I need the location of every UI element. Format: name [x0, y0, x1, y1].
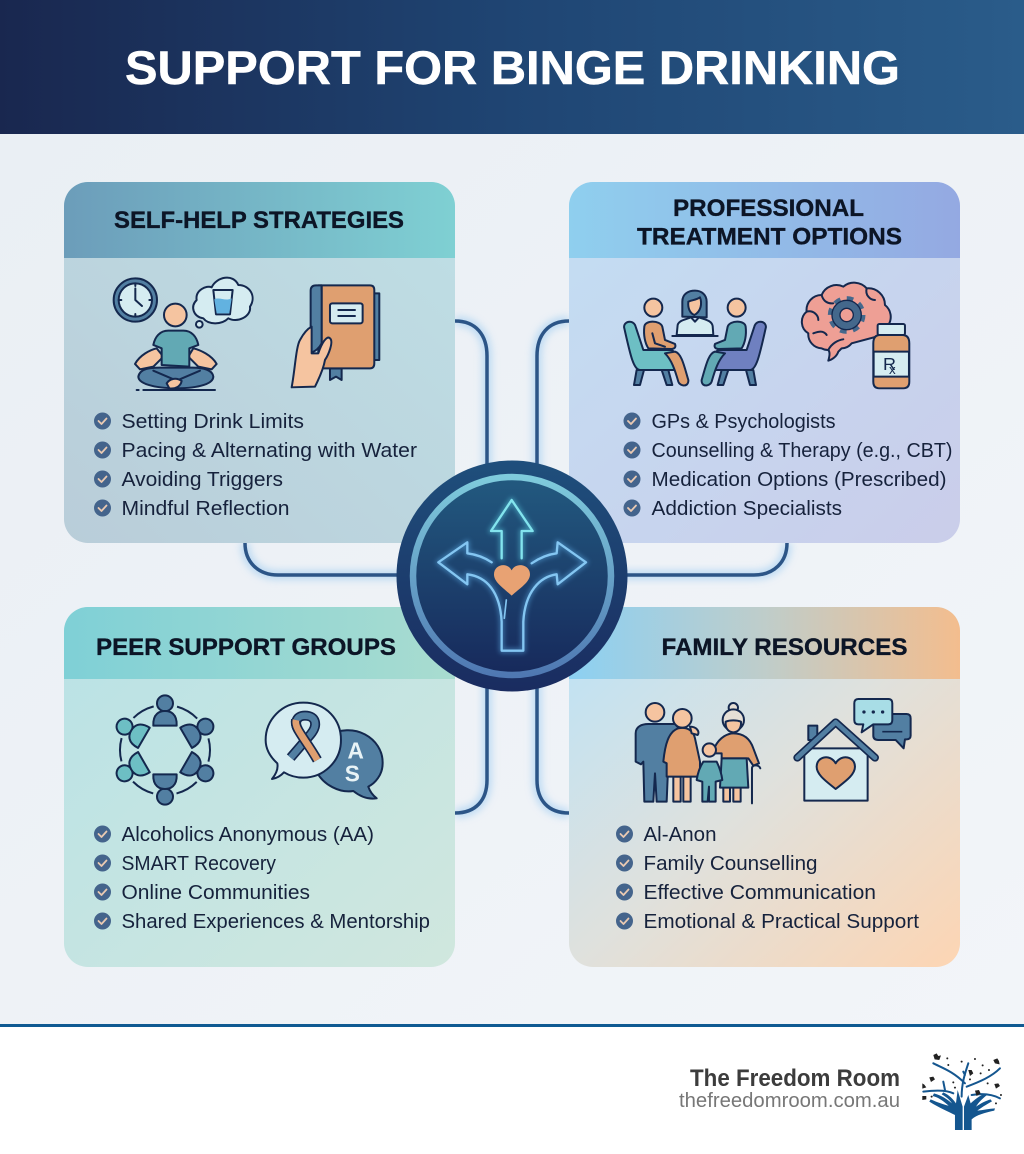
- footer brand name: The Freedom Room: [690, 1065, 900, 1092]
- connector lines: [245, 321, 787, 813]
- icon: speech bubbles with ribbon: A: [347, 737, 364, 763]
- list: family items: [616, 823, 919, 933]
- footer: [0, 1024, 1024, 1154]
- panel: peer support groups: [64, 607, 455, 967]
- list: family items: Al-Anon: [644, 823, 716, 846]
- list: self-help items: Mindful Reflection: [122, 497, 290, 520]
- list: professional items: [624, 410, 952, 520]
- heading: professional treatment options: PROFESSIONAL: [673, 195, 864, 222]
- list: self-help items: Avoiding Triggers: [122, 468, 283, 491]
- heading: self-help strategies: SELF-HELP STRATEGIES: [114, 207, 404, 234]
- list: self-help items: Setting Drink Limits: [122, 410, 304, 433]
- list: family items: Effective Communication: [644, 881, 876, 904]
- center badge: crossroads with heart: [396, 460, 628, 692]
- icon: counselling session: [624, 283, 909, 388]
- footer website: thefreedomroom.com.au: [679, 1090, 900, 1112]
- list: peer support items: Shared Experiences & Mentorship: [122, 910, 430, 933]
- icon: speech bubbles with ribbon: S: [345, 761, 360, 787]
- list: professional items: Addiction Specialists: [652, 497, 842, 520]
- heading: peer support groups: PEER SUPPORT GROUPS: [96, 634, 396, 661]
- icon: meditating person with clock and water thought: [114, 278, 379, 390]
- list: professional items: GPs & Psychologists: [652, 410, 836, 433]
- icon: tree with hands logo: [922, 1053, 1002, 1130]
- heading: family resources: FAMILY RESOURCES: [662, 634, 908, 661]
- icon: speech bubbles with ribbon: [266, 703, 383, 799]
- panel: professional treatment options: [569, 182, 960, 543]
- list: family items: Emotional & Practical Support: [644, 910, 919, 933]
- panel: family resources: [569, 607, 960, 967]
- icon: counselling session: x: [889, 362, 896, 377]
- list: peer support items: SMART Recovery: [122, 852, 277, 875]
- panel: self-help strategies: [64, 182, 455, 543]
- icon: family: [636, 703, 760, 803]
- icon: counselling session: R: [883, 354, 896, 374]
- list: peer support items: [94, 823, 430, 933]
- icon: house with heart and chat bubbles: [797, 699, 911, 801]
- list: family items: Family Counselling: [644, 852, 818, 875]
- list: peer support items: Alcoholics Anonymous (AA): [122, 823, 374, 846]
- list: self-help items: [94, 410, 417, 520]
- icon: group circle: [110, 695, 220, 805]
- title: SUPPORT FOR BINGE DRINKING: [125, 41, 900, 94]
- list: professional items: Medication Options (Prescribed): [652, 468, 946, 491]
- page background: [0, 134, 1024, 1026]
- list: professional items: Counselling & Therapy (e.g., CBT): [652, 439, 952, 462]
- title banner: [0, 0, 1024, 134]
- list: self-help items: Pacing & Alternating with Water: [122, 439, 417, 462]
- panel: professional treatment options: TREATMENT OPTIONS: [637, 224, 902, 250]
- list: peer support items: Online Communities: [122, 881, 310, 904]
